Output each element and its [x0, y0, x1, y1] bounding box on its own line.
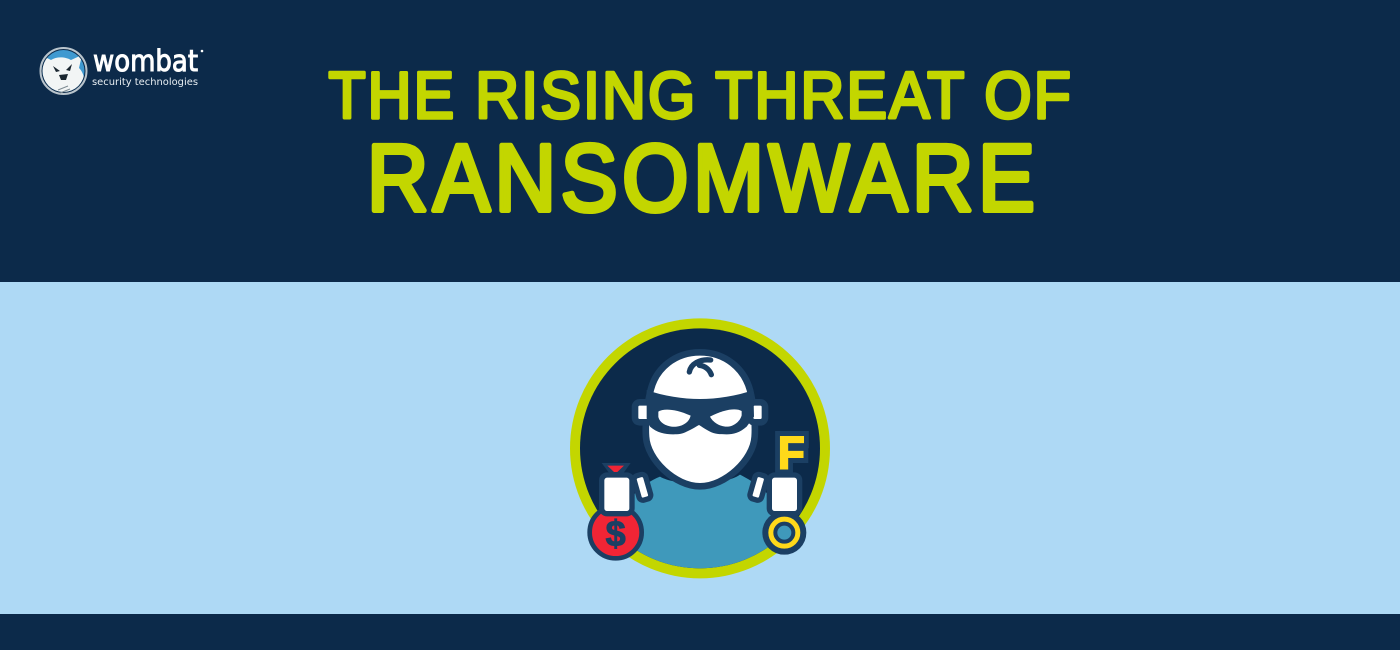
left hand	[602, 475, 632, 514]
bag knot	[602, 463, 631, 475]
right arm cuff	[749, 473, 767, 501]
logo tagline: security technologies	[92, 77, 198, 88]
badge background	[580, 328, 820, 568]
money bag	[590, 463, 642, 558]
title	[328, 60, 1071, 232]
forehead wrinkle	[689, 360, 711, 375]
key hole	[775, 524, 793, 542]
footer band	[0, 614, 1400, 650]
left arm cuff	[633, 473, 652, 501]
badge ring	[570, 318, 830, 578]
right ear	[750, 402, 765, 422]
key teeth letter F outline: F	[778, 427, 805, 478]
right hand	[769, 475, 800, 514]
logo: wombat security technologies	[40, 44, 203, 96]
bag tie	[607, 466, 624, 472]
thief mask	[647, 390, 754, 434]
thief head	[646, 352, 755, 486]
left eye	[658, 410, 691, 427]
right eye	[710, 409, 742, 427]
bag body	[590, 506, 642, 558]
logo wordmark: wombat	[93, 44, 198, 78]
title line 1: THE RISING THREAT OF	[328, 60, 1071, 133]
left ear	[635, 402, 652, 422]
key teeth letter F: F	[778, 427, 805, 478]
icon: wombat mascot	[40, 48, 86, 96]
logo registered mark	[201, 50, 203, 52]
header band	[0, 0, 1400, 282]
thief body	[634, 474, 771, 568]
title line 2: RANSOMWARE	[367, 126, 1035, 232]
icon: ransomware thief badge	[570, 318, 830, 578]
key ring	[765, 514, 803, 552]
dollar sign: $	[606, 513, 626, 554]
key	[765, 427, 805, 552]
